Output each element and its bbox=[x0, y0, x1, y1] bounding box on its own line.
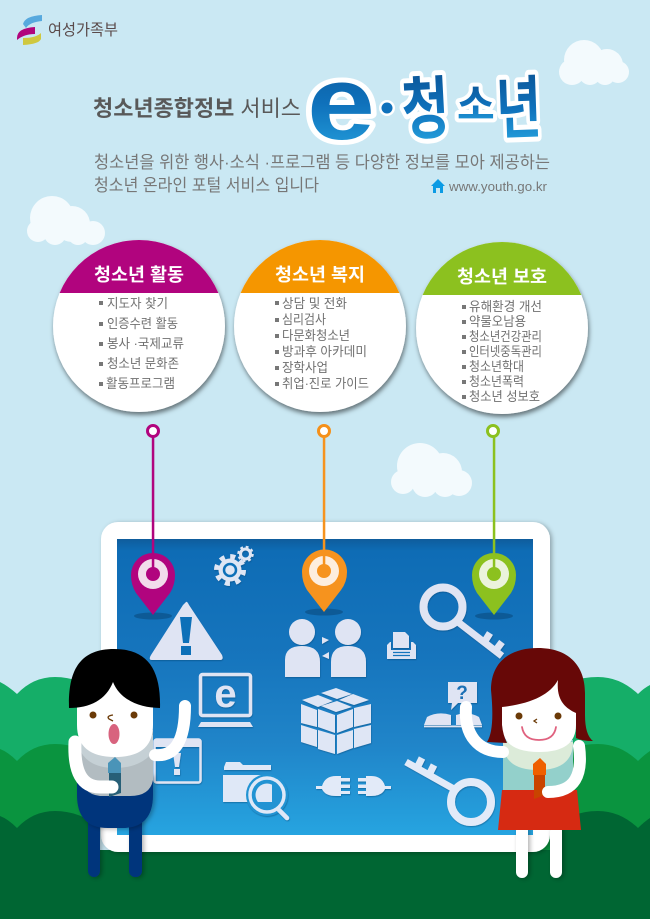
icon: book and question bubble: ? bbox=[456, 683, 468, 704]
hair bbox=[487, 648, 593, 743]
icon: plugs bbox=[316, 776, 391, 796]
service logo: e·청소년: 년 bbox=[495, 69, 543, 148]
tie bbox=[533, 758, 546, 775]
face bbox=[77, 675, 153, 757]
website link with home icon: www.youth.go.kr bbox=[448, 179, 548, 194]
ministry logo bbox=[17, 15, 118, 45]
panel: 청소년 보호: 청소년 보호 bbox=[457, 267, 547, 287]
character: boy bbox=[69, 649, 185, 877]
icon: printer bbox=[387, 632, 416, 659]
panel: 청소년 활동: 청소년 문화존 bbox=[107, 356, 179, 371]
service logo: e·청소년: 소 bbox=[457, 82, 495, 128]
panel: 청소년 복지: 청소년 복지 bbox=[275, 265, 365, 285]
icon: key bottom right bbox=[406, 758, 491, 822]
smile bbox=[522, 727, 556, 740]
legs bbox=[88, 810, 142, 877]
panel: 청소년 보호: 약물오남용 bbox=[469, 314, 526, 329]
shirt bbox=[80, 730, 153, 796]
character: girl bbox=[466, 648, 593, 878]
tablet frame bbox=[101, 522, 550, 852]
description text bbox=[94, 153, 550, 195]
pin and line: purple bbox=[131, 426, 175, 620]
pin and line: green bbox=[472, 426, 516, 620]
panel: 청소년 보호: 유해환경 개선 bbox=[469, 299, 542, 314]
panel: 청소년 복지: 심리검사 bbox=[282, 312, 326, 327]
cloud: middle bbox=[391, 443, 472, 497]
description text: 청소년 온라인 포털 서비스 입니다 bbox=[94, 176, 319, 195]
panel: 청소년 활동: 활동프로그램 bbox=[106, 376, 175, 391]
eyes and nose bbox=[516, 712, 562, 723]
panel: 청소년 복지 bbox=[230, 238, 410, 412]
right arm bbox=[548, 746, 580, 792]
legs bbox=[516, 825, 562, 878]
blouse bbox=[503, 740, 573, 792]
panel: 청소년 활동: 봉사 ·국제교류 bbox=[107, 336, 184, 351]
face bbox=[502, 672, 576, 752]
panel: 청소년 보호: 청소년건강관리 bbox=[469, 329, 542, 344]
tie bbox=[108, 757, 121, 773]
description text: 청소년을 위한 행사·소식 ·프로그램 등 다양한 정보를 모아 제공하는 bbox=[94, 153, 550, 172]
icon: browser alert bbox=[154, 740, 200, 782]
panel: 청소년 활동 bbox=[50, 238, 230, 412]
panel: 청소년 활동: 지도자 찾기 bbox=[107, 296, 168, 311]
icon: cube bbox=[301, 688, 371, 754]
panel: 청소년 보호: 청소년 성보호 bbox=[469, 389, 540, 404]
icon: laptop with e: e bbox=[214, 672, 237, 716]
pants bbox=[77, 775, 153, 828]
panel: 청소년 보호: 인터넷중독관리 bbox=[469, 344, 542, 359]
panel: 청소년 복지: 방과후 아카데미 bbox=[282, 344, 367, 359]
right arm bbox=[155, 706, 185, 755]
cloud: left bbox=[27, 196, 105, 245]
skirt bbox=[498, 790, 581, 830]
left arm bbox=[75, 742, 112, 787]
panel: 청소년 보호: 청소년학대 bbox=[469, 359, 524, 374]
panel: 청소년 복지: 장학사업 bbox=[282, 360, 328, 375]
ministry logo: 여성가족부 bbox=[48, 21, 118, 39]
panel: 청소년 복지: 취업·진로 가이드 bbox=[282, 376, 369, 391]
panel: 청소년 복지: 다문화청소년 bbox=[282, 328, 350, 343]
icon: people talking bbox=[285, 619, 366, 677]
panel: 청소년 보호 bbox=[410, 238, 590, 414]
pin and line: orange bbox=[302, 426, 347, 616]
panel: 청소년 보호: 청소년폭력 bbox=[469, 374, 524, 389]
icon: key top right bbox=[424, 588, 502, 656]
icon: laptop with e bbox=[198, 672, 253, 727]
service logo: e·청소년: e bbox=[307, 45, 375, 162]
panel: 청소년 복지: 상담 및 전화 bbox=[282, 296, 347, 311]
eyes and nose bbox=[90, 712, 138, 721]
hair bbox=[69, 649, 160, 708]
icon: warning triangle bbox=[150, 602, 223, 660]
icon: folder with magnifier bbox=[223, 762, 288, 818]
left arm bbox=[466, 707, 503, 752]
icon: gears bbox=[216, 547, 252, 584]
mouth bbox=[108, 724, 120, 744]
cloud: top right bbox=[559, 40, 629, 85]
green hills bbox=[0, 677, 650, 919]
panel: 청소년 활동: 인증수련 활동 bbox=[107, 316, 178, 331]
service logo: e·청소년 bbox=[307, 45, 543, 162]
panel: 청소년 활동: 청소년 활동 bbox=[94, 265, 184, 285]
service logo: e·청소년: 청 bbox=[400, 70, 451, 149]
icon: book and question bubble bbox=[424, 682, 482, 727]
title: 청소년종합정보 서비스 bbox=[93, 96, 301, 121]
